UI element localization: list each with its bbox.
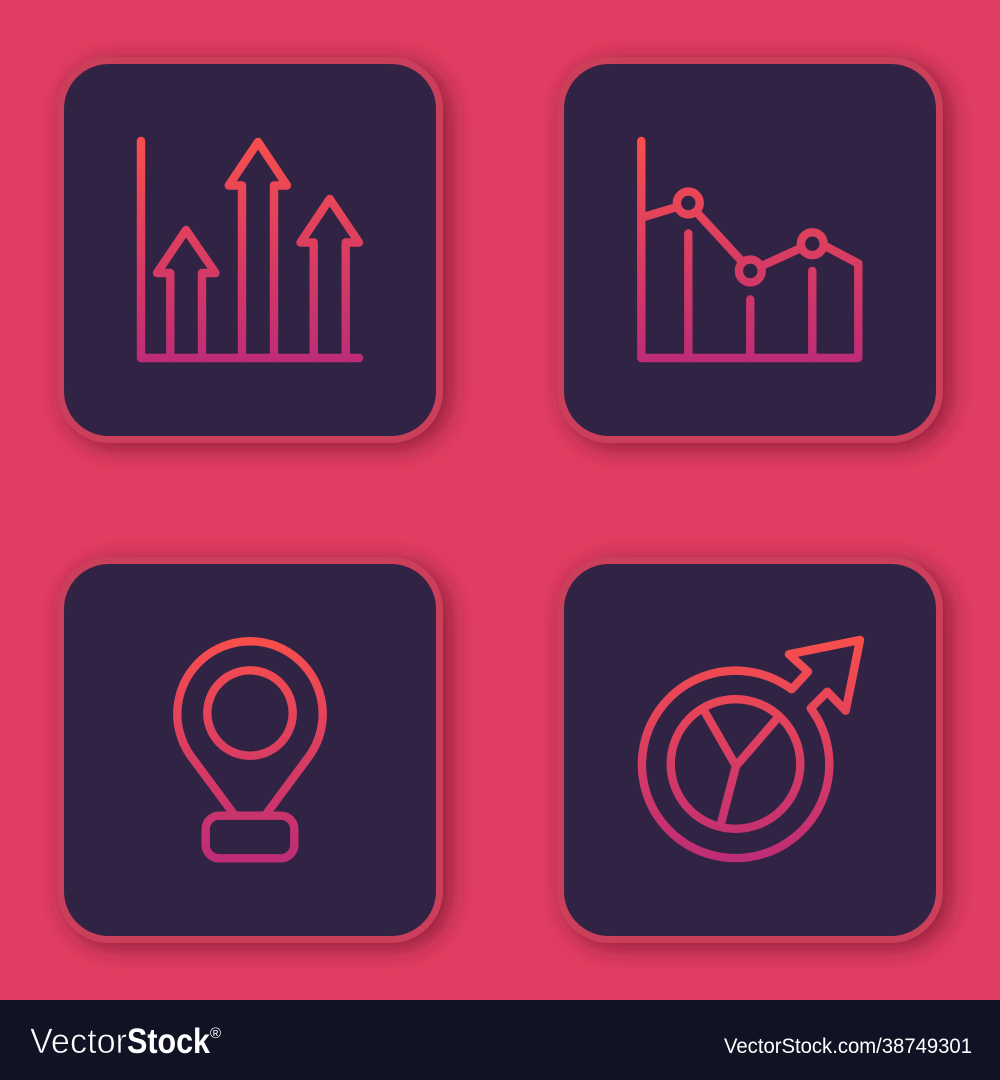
image id text: VectorStock.com/38749301 — [724, 1035, 972, 1058]
icon: bar chart with up arrows — [141, 141, 359, 358]
icon: line chart with data points — [641, 141, 858, 358]
panel: map pin card — [60, 560, 450, 948]
panel: declining line chart card — [560, 60, 950, 448]
icon: male symbol with pie chart — [642, 640, 860, 858]
footer bar — [0, 1000, 1000, 1080]
logo: VectorStock wordmark: ® — [210, 1025, 221, 1042]
panel: rising arrows chart card — [60, 60, 450, 448]
panel: male symbol pie chart card — [560, 560, 950, 948]
logo: VectorStock wordmark: VectorStock — [30, 1022, 222, 1061]
icon: location pin — [177, 641, 323, 858]
